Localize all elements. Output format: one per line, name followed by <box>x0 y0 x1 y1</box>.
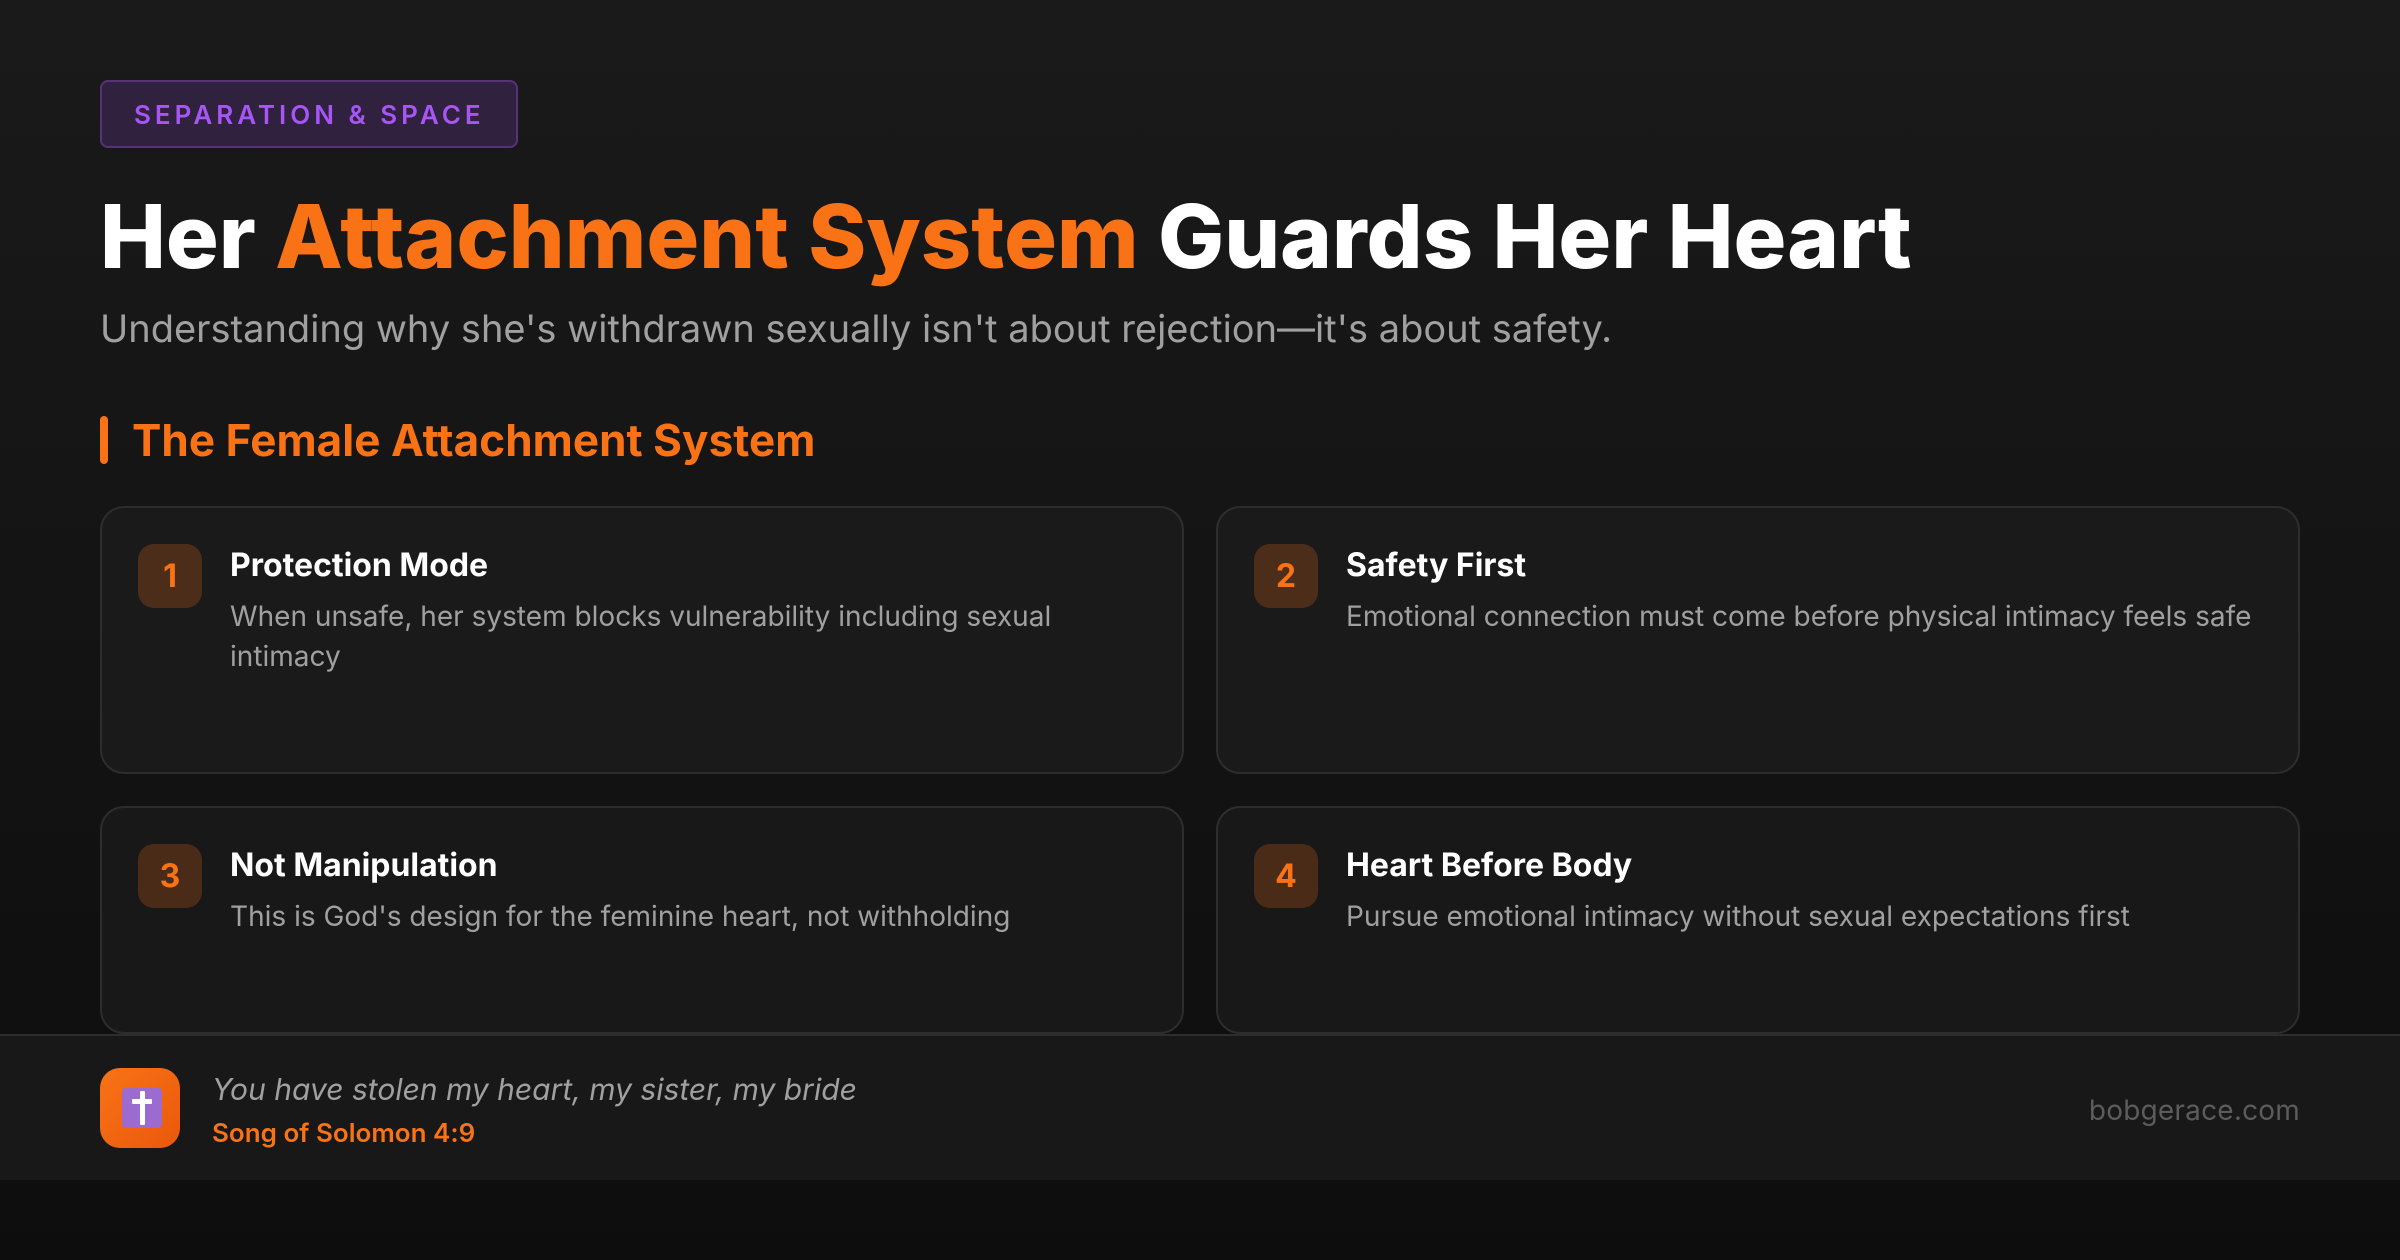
card title: Heart Before Body <box>1346 845 1632 884</box>
card description: When unsafe, her system blocks vulnerability including sexual intimacy <box>230 599 1051 673</box>
card title: Not Manipulation <box>230 845 498 884</box>
scripture reference: Song of Solomon 4:9 <box>212 1118 475 1149</box>
number badge 3: 3 <box>160 856 180 895</box>
panel: card 3 not manipulation <box>100 806 1184 1034</box>
number badge 2: 2 <box>1276 556 1296 595</box>
card title: Safety First <box>1346 545 1526 584</box>
number badge 4: 4 <box>1275 856 1297 895</box>
category badge: SEPARATION & SPACE <box>134 100 485 131</box>
panel: card 1 protection mode <box>100 506 1184 774</box>
card description: This is God's design for the feminine heart, not withholding <box>230 899 1010 933</box>
heading text: The Female Attachment System <box>132 413 815 467</box>
number badge 1: 1 <box>163 556 177 595</box>
heading accent bar <box>100 416 108 464</box>
panel: card 2 safety first <box>1216 506 2300 774</box>
card description: Pursue emotional intimacy without sexual expectations first <box>1346 899 2130 933</box>
card description: Emotional connection must come before physical intimacy feels safe <box>1346 599 2251 633</box>
card title: Protection Mode <box>230 545 488 584</box>
icon: cross <box>100 1068 180 1148</box>
number badge 3 <box>138 844 202 908</box>
number badge 2 <box>1254 544 1318 608</box>
subtitle: Understanding why she's withdrawn sexually isn't about rejection—it's about safety. <box>100 306 1612 352</box>
section heading <box>100 413 815 467</box>
website: bobgerace.com <box>2089 1093 2300 1127</box>
number badge 1 <box>138 544 202 608</box>
footer bar <box>0 1034 2400 1180</box>
title: Her Attachment System Guards Her Heart <box>100 184 1912 290</box>
category badge <box>100 80 518 148</box>
scripture quote: You have stolen my heart, my sister, my bride <box>212 1072 857 1108</box>
number badge 4 <box>1254 844 1318 908</box>
panel: card 4 heart before body <box>1216 806 2300 1034</box>
